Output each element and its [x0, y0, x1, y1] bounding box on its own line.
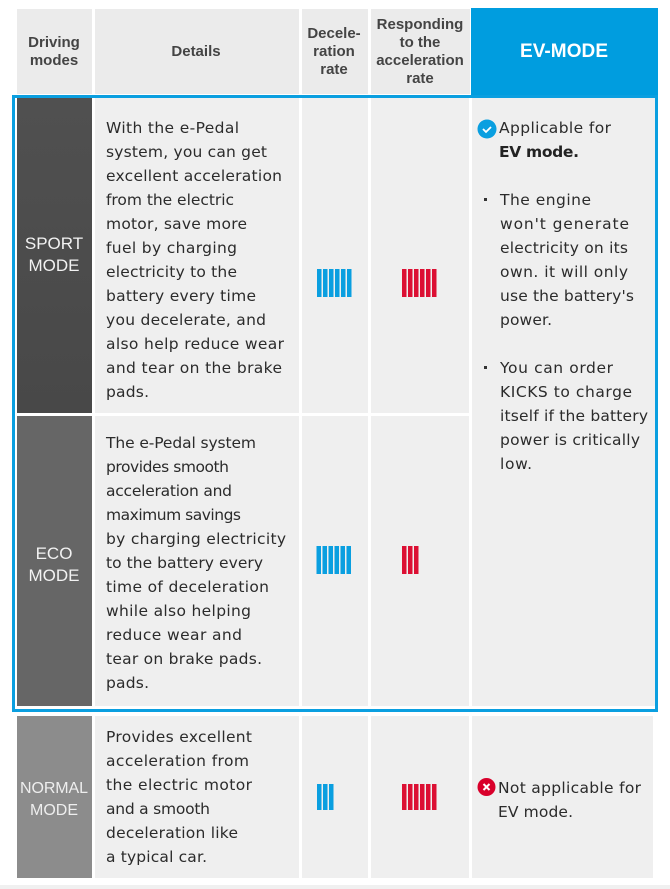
panel: EV mode not applicable: Not applicable for	[498, 779, 642, 797]
panel: eco mode details: acceleration and	[106, 482, 232, 500]
panel: normal mode details: and a smooth	[106, 800, 210, 818]
panel: EV mode applicable: power is critically	[500, 431, 640, 449]
panel: sport mode details: With the e-Pedal	[106, 119, 239, 137]
panel: eco mode details: by charging electricity	[106, 530, 286, 548]
header: details: Details	[171, 43, 221, 60]
panel: normal deceleration bars	[302, 716, 368, 878]
panel: EV mode applicable: Applicable for	[499, 119, 612, 137]
panel: EV mode applicable: You can order	[499, 359, 614, 377]
panel: normal mode details: a typical car.	[106, 848, 207, 866]
panel: normal mode details	[95, 716, 299, 878]
header: responding to the acceleration rate	[371, 9, 470, 94]
panel: sport mode details: electricity to the	[106, 263, 237, 281]
panel: eco mode details: provides smooth	[106, 458, 229, 476]
panel: normal acceleration bars	[371, 716, 469, 878]
panel: normal mode details: Provides excellent	[106, 728, 252, 746]
panel: eco mode details: to the battery every	[106, 554, 263, 572]
panel: normal mode label: MODE	[30, 802, 78, 819]
panel: sport mode details: battery every time	[106, 287, 256, 305]
panel: eco mode details: time of deceleration	[106, 578, 269, 596]
panel: sport mode details: fuel by charging	[106, 239, 237, 257]
panel: EV mode applicable: The engine	[499, 191, 591, 209]
header: driving modes: Driving	[28, 34, 80, 51]
header: responding to the acceleration rate: acceleration	[376, 52, 464, 69]
header: driving modes	[17, 9, 92, 94]
panel: EV mode applicable: use the battery's	[500, 287, 634, 305]
panel: EV mode applicable: itself if the battery	[500, 407, 648, 425]
panel: sport mode details: you decelerate, and	[106, 311, 266, 329]
panel: sport deceleration bars	[302, 98, 368, 413]
header: responding to the acceleration rate: to the	[400, 34, 440, 51]
panel: sport mode details: system, you can get	[106, 143, 267, 161]
panel: sport mode details	[95, 98, 299, 413]
panel: EV mode applicable: EV mode.	[499, 143, 579, 161]
panel: eco mode details: tear on brake pads.	[106, 650, 262, 668]
panel: eco mode details: maximum savings	[106, 506, 241, 524]
panel: EV mode applicable	[472, 98, 655, 706]
header: driving modes: modes	[30, 52, 78, 69]
panel: normal mode details: deceleration like	[106, 824, 238, 842]
header: EV-MODE: EV-MODE	[520, 41, 608, 62]
panel: sport mode label	[17, 98, 92, 413]
panel: eco mode details: The e-Pedal system	[105, 434, 256, 452]
panel: eco mode label	[17, 416, 92, 706]
panel: eco mode label: MODE	[28, 566, 80, 585]
panel: eco acceleration bars	[371, 416, 469, 706]
panel: EV mode applicable: power.	[500, 311, 552, 329]
panel: sport mode details: and tear on the brake	[106, 359, 282, 377]
panel: eco mode details: reduce wear and	[106, 626, 242, 644]
header: details	[95, 9, 299, 94]
header: deceleration rate: ration	[313, 43, 355, 60]
panel: sport mode details: from the electric	[106, 191, 234, 209]
header: deceleration rate: rate	[320, 61, 348, 78]
header: responding to the acceleration rate: rate	[406, 70, 434, 87]
panel: EV mode not applicable: EV mode.	[498, 803, 573, 821]
panel: normal mode details: the electric motor	[106, 776, 253, 794]
panel: sport mode details: motor, save more	[106, 215, 247, 233]
panel: sport mode label: MODE	[28, 256, 80, 275]
panel: sport mode details: excellent acceleration	[106, 167, 282, 185]
panel: normal mode label: NORMAL	[20, 780, 88, 797]
panel: EV mode applicable: won't generate	[500, 215, 629, 233]
panel: eco mode details: while also helping	[106, 602, 251, 620]
panel: normal mode label	[17, 716, 92, 878]
panel: EV mode not applicable	[472, 716, 653, 878]
header: responding to the acceleration rate: Responding	[377, 16, 463, 33]
panel: EV mode applicable: low.	[500, 455, 532, 473]
blue frame around sport and eco modes	[14, 96, 656, 710]
icon: check mark	[478, 120, 496, 138]
icon: cross mark	[478, 778, 496, 796]
header: EV-MODE	[471, 8, 658, 96]
panel: eco mode details: pads.	[106, 674, 149, 692]
panel: sport mode details: pads.	[106, 383, 149, 401]
panel: EV mode applicable: electricity on its	[500, 239, 628, 257]
panel: sport mode label: SPORT	[25, 234, 83, 253]
panel: EV mode applicable: KICKS to charge	[500, 383, 632, 401]
panel: eco deceleration bars	[302, 416, 368, 706]
panel: EV mode applicable: own. it will only	[500, 263, 628, 281]
panel: normal mode details: acceleration from	[106, 752, 249, 770]
panel: sport acceleration bars	[371, 98, 469, 413]
panel: sport mode details: also help reduce wear	[106, 335, 285, 353]
panel: eco mode details	[95, 416, 299, 706]
panel: eco mode label: ECO	[36, 544, 72, 563]
header: deceleration rate	[302, 9, 368, 94]
header: deceleration rate: Decele-	[307, 25, 361, 42]
